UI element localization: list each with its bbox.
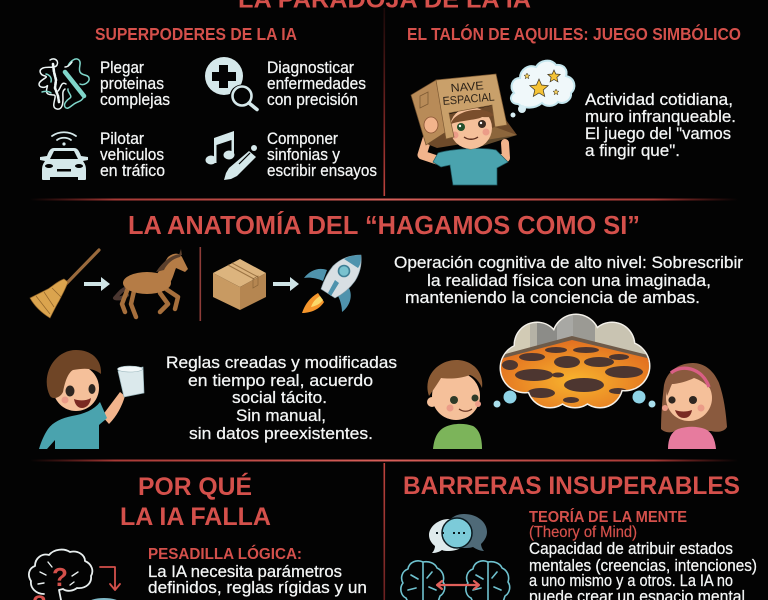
text: teoría de la mente: (Theory of Mind) (529, 524, 637, 541)
text: pesadilla lógica: definidos, reglas rígidas y un (148, 579, 367, 597)
text: teoría de la mente: a uno mismo y a otros. La IA no (529, 572, 733, 590)
text: actividad cotidiana: a fingir que". (585, 142, 680, 160)
heading: por qué la IA falla: LA IA FALLA (120, 503, 271, 531)
text: componer: Componer (267, 130, 338, 148)
heading: por qué la IA falla: POR QUÉ (138, 472, 252, 501)
text: teoría de la mente (529, 509, 757, 600)
illustration: child with cardboard box (411, 74, 517, 185)
heading: barreras insuperables: BARRERAS INSUPERABLES (403, 472, 740, 500)
text: teoría de la mente: mentales (creencias, intenciones) (529, 557, 757, 575)
icon: car with signal (40, 132, 88, 180)
text: actividad cotidiana: El juego del "vamos (585, 125, 731, 143)
text: teoría de la mente: TEORÍA DE LA MENTE (529, 509, 687, 526)
panel: talón de Aquiles (407, 23, 741, 185)
illustration: girl imagining (661, 363, 727, 449)
icon: brain with question mark: ? (52, 562, 68, 592)
text: reglas creadas: Sin manual, (236, 407, 326, 425)
text: pilotar: en tráfico (100, 162, 165, 180)
panel: por qué la IA falla (29, 472, 367, 600)
text: operación cognitiva: manteniendo la conciencia de ambas. (405, 289, 700, 307)
text: plegar proteinas (100, 59, 170, 109)
text: diagnosticar (267, 59, 366, 109)
text: pesadilla lógica: La IA necesita parámetros (148, 563, 342, 581)
heading: superpoderes: SUPERPODERES DE LA IA (95, 24, 297, 44)
icon: thought cloud with stars (510, 61, 574, 118)
text: pilotar: vehiculos (100, 146, 164, 164)
text: box label (442, 80, 496, 108)
icon: speech bubbles and brains (401, 514, 510, 600)
icon: music and pen (206, 131, 257, 180)
text: reglas creadas: sin datos preexistentes. (189, 425, 373, 443)
panel: barreras insuperables (401, 472, 757, 600)
text: pilotar (100, 130, 165, 180)
text: actividad cotidiana: Actividad cotidiana, (585, 91, 733, 109)
icon: protein (39, 59, 89, 109)
text: box label: NAVE (450, 80, 484, 95)
panel: superpoderes de la IA (39, 24, 377, 180)
illustration: boy holding cup (39, 350, 144, 449)
icon: cardboard box (213, 259, 266, 310)
panel: anatomía del hagamos como si (30, 210, 744, 449)
text: actividad cotidiana: muro infranqueable. (585, 108, 736, 126)
icon: rocket (302, 255, 361, 313)
text: operación cognitiva: Operación cognitiva de alto nivel: Sobrescribir (394, 254, 744, 272)
text: box label: ESPACIAL (442, 91, 496, 108)
icon: broom (30, 250, 99, 318)
text: plegar proteinas: proteinas (100, 75, 164, 93)
text: teoría de la mente: Capacidad de atribuir estados (529, 540, 733, 558)
text: plegar proteinas: Plegar (100, 59, 144, 77)
text: reglas creadas (166, 354, 397, 443)
text: reglas creadas: Reglas creadas y modificadas (166, 354, 397, 372)
text: componer: escribir ensayos (267, 162, 377, 180)
icon: brain with question mark (29, 550, 120, 600)
icon: diagnosis magnifier (205, 57, 257, 110)
text: actividad cotidiana (585, 91, 736, 160)
text: diagnosticar: con precisión (267, 91, 358, 109)
text: diagnosticar: enfermedades (267, 75, 366, 93)
text: pesadilla lógica: PESADILLA LÓGICA: (148, 545, 302, 563)
heading: anatomía: LA ANATOMÍA DEL “HAGAMOS COMO SI” (128, 210, 640, 240)
text: componer: sinfonias y (267, 146, 341, 164)
text: operación cognitiva (394, 254, 744, 307)
heading: por qué la IA falla (120, 472, 271, 531)
text: pilotar: Pilotar (100, 130, 144, 148)
illustration: boy imagining (427, 360, 482, 449)
text: reglas creadas: en tiempo real, acuerdo (188, 372, 373, 390)
divider: between examples (200, 247, 201, 321)
arrow: broom to horse (84, 277, 110, 291)
text: reglas creadas: social tácito. (232, 389, 327, 407)
text: plegar proteinas: complejas (100, 91, 170, 109)
icon: horse (115, 249, 188, 317)
text: operación cognitiva: la realidad física con una imaginada, (427, 272, 711, 290)
text: diagnosticar: Diagnosticar (267, 59, 354, 77)
icon: lava thought cloud (494, 310, 656, 415)
arrow: box to rocket (273, 277, 299, 291)
text: pesadilla lógica (148, 545, 367, 597)
text: componer (267, 130, 377, 180)
